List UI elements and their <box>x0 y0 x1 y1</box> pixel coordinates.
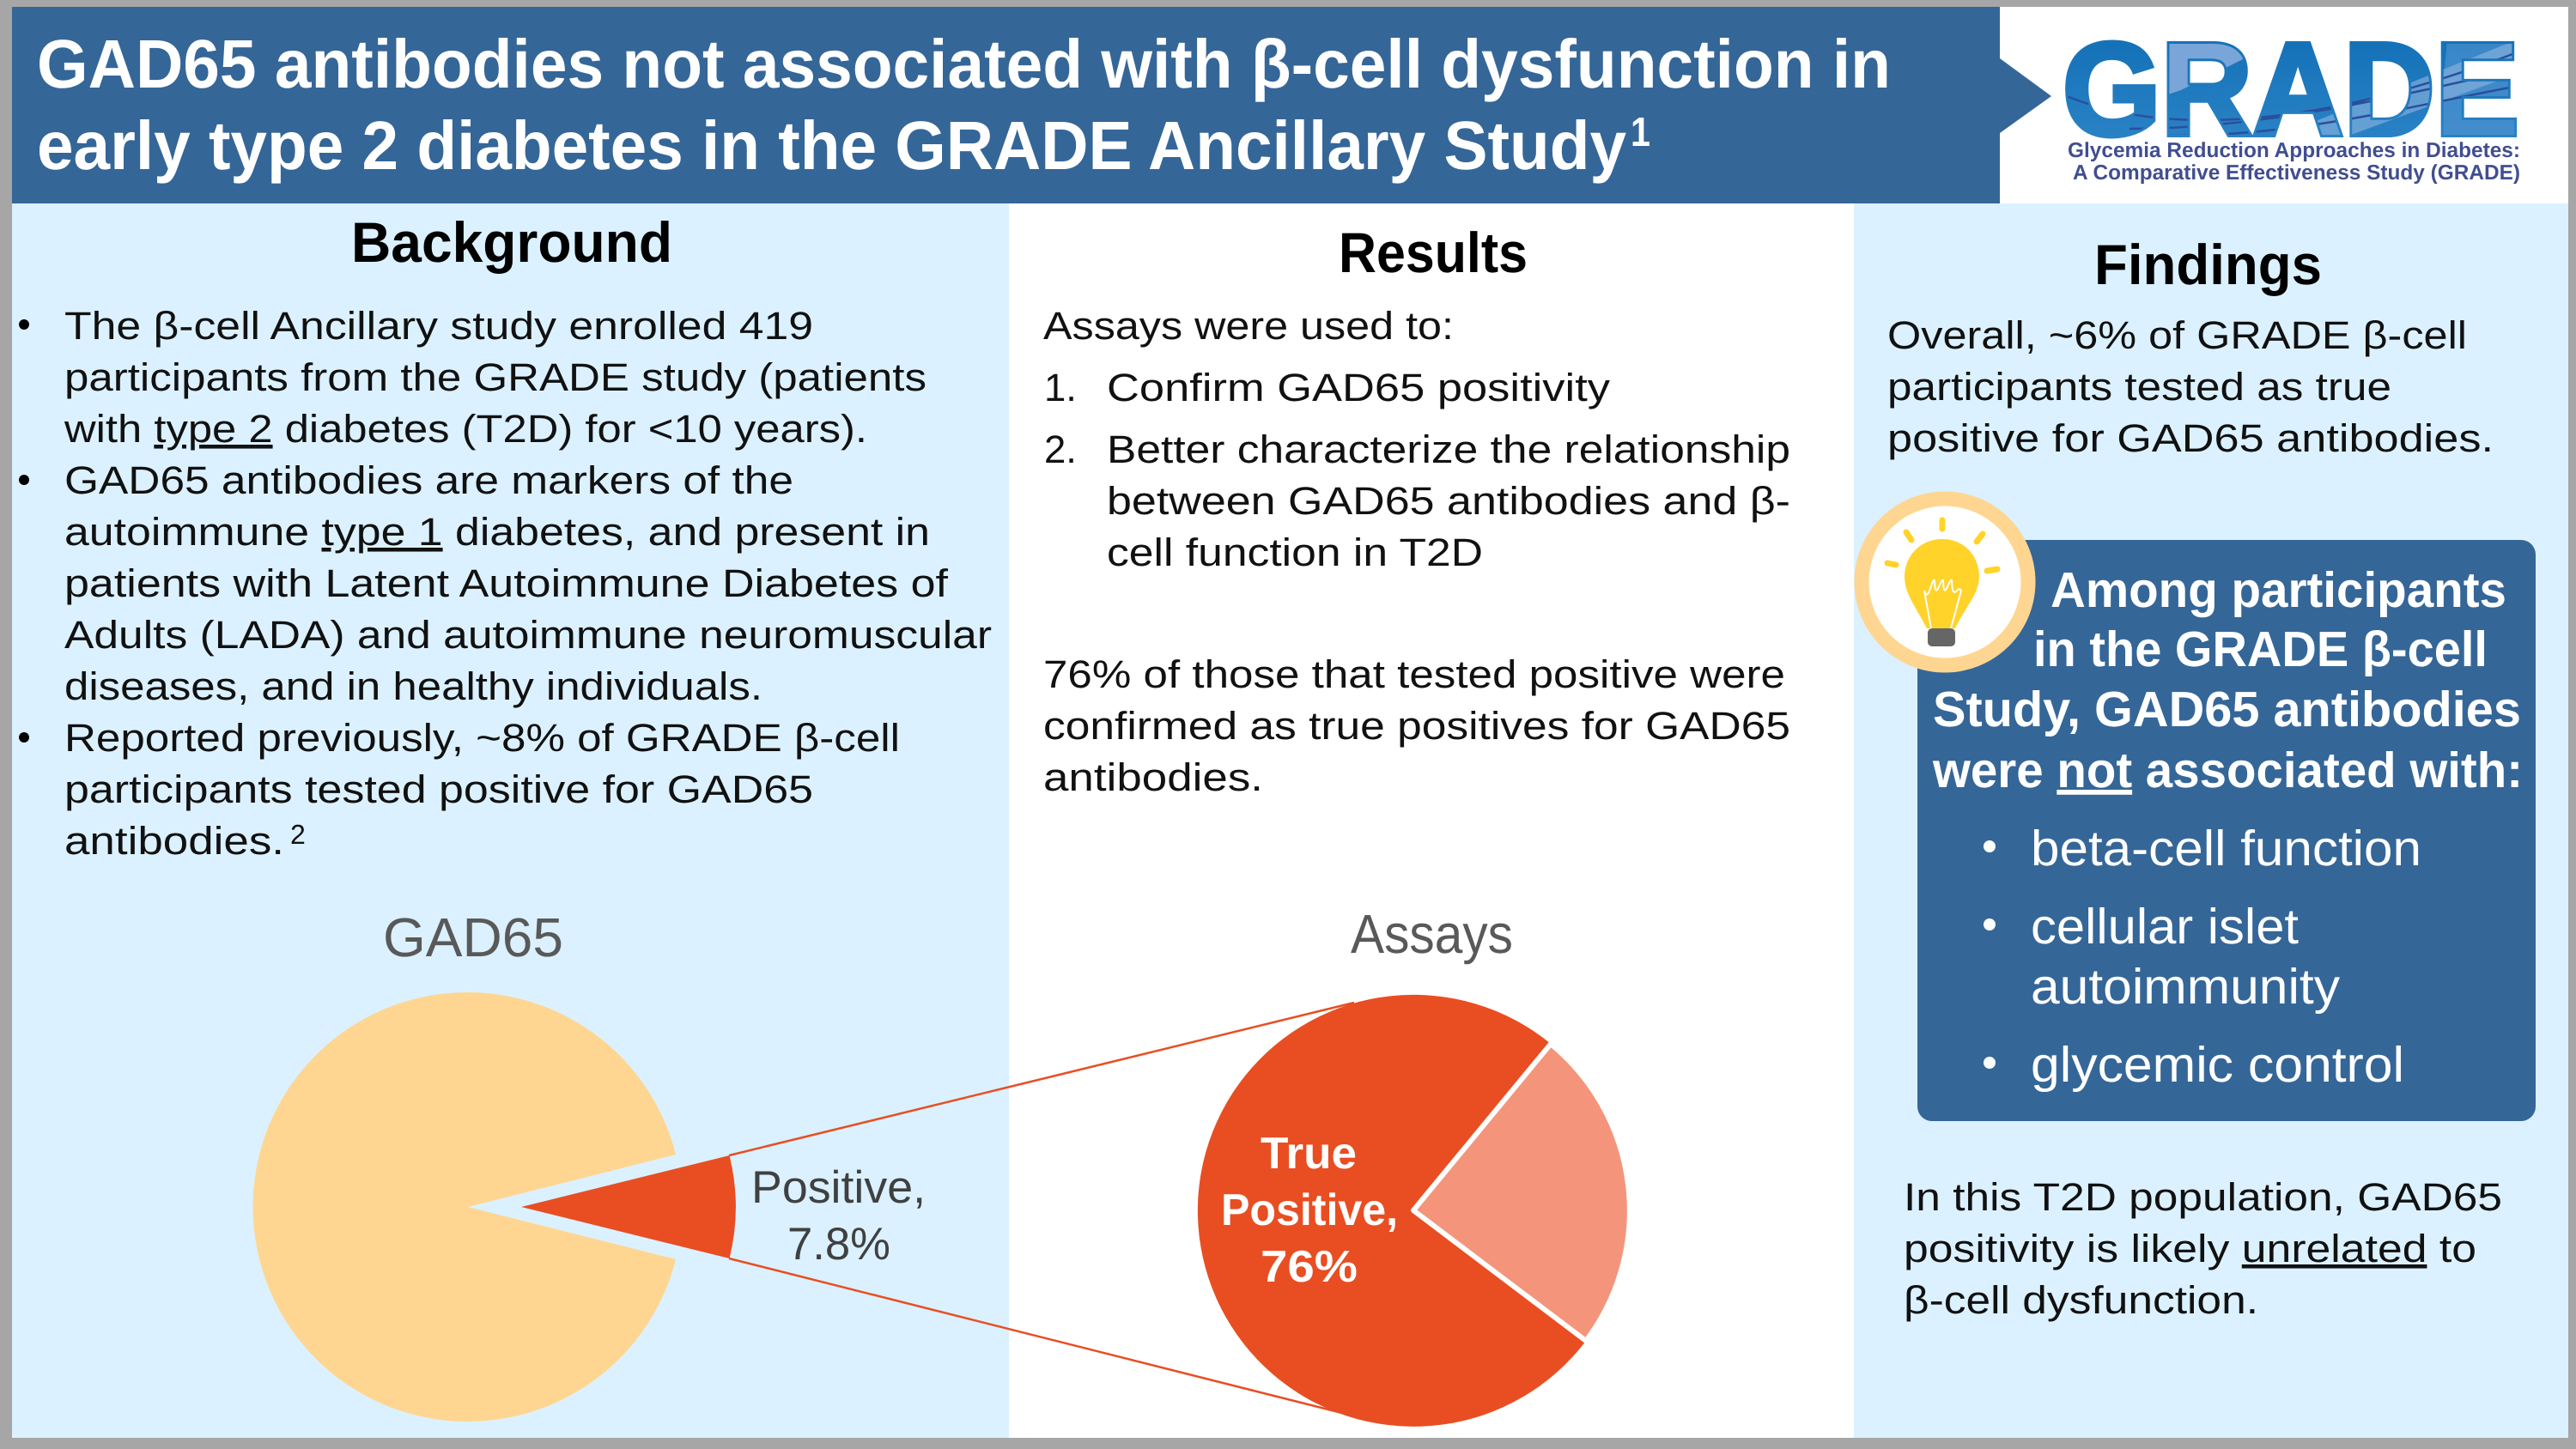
background bullet list: Adults (LADA) and autoimmune neuromuscular <box>64 613 992 657</box>
background bullet list: participants tested positive for GAD65 <box>64 767 813 811</box>
results text: assay aims: between GAD65 antibodies and β- <box>1107 479 1790 523</box>
findings text: conclusion: β-cell dysfunction. <box>1904 1278 2258 1322</box>
logo: GRADE <box>2000 7 2568 203</box>
findings heading: Findings <box>2094 233 2322 296</box>
logo: GRADE: Glycemia Reduction Approaches in Diabetes: <box>2068 139 2520 162</box>
results text: assay aims: 1. <box>1044 366 1077 409</box>
findings text: conclusion <box>1904 1175 2502 1322</box>
background bullet list: Reported previously, ~8% of GRADE β-cell <box>64 716 900 760</box>
callout box: were not associated with: <box>1932 743 2523 798</box>
background bullet list: autoimmune type 1 diabetes, and present in <box>64 510 930 554</box>
callout box <box>1917 540 2536 1121</box>
callout box: autoimmunity <box>2031 959 2340 1015</box>
label: positive 7.8%: Positive, <box>751 1162 926 1213</box>
panel: background <box>12 203 1009 1438</box>
findings text: overall: Overall, ~6% of GRADE β-cell <box>1887 313 2467 357</box>
pie chart: Assays <box>1198 995 1630 1427</box>
results text: confirmation: 76% of those that tested positive were <box>1043 652 1785 696</box>
results text: assay aims: cell function in T2D <box>1107 530 1483 574</box>
results text: assay aims: Better characterize the relationship <box>1107 427 1790 471</box>
background heading: Background <box>351 210 672 274</box>
pie chart title: Assays: Assays <box>1351 903 1513 965</box>
label: true positive 76%: Positive, <box>1221 1185 1398 1235</box>
callout box: cellular islet <box>2031 899 2299 955</box>
results text: confirmation <box>1043 652 1790 799</box>
title: early type 2 diabetes in the GRADE Ancillary Study <box>37 107 1626 184</box>
logo: GRADE: A Comparative Effectiveness Study (GRADE) <box>2073 161 2520 185</box>
logo: GRADE: GRADE <box>2063 15 2519 163</box>
results text: confirmation: antibodies. <box>1043 755 1263 799</box>
findings text: overall <box>1887 313 2494 460</box>
results text: confirmation: confirmed as true positives for GAD65 <box>1043 704 1790 748</box>
callout box: beta-cell function <box>2031 821 2421 876</box>
callout box: glycemic control <box>2031 1037 2404 1093</box>
background bullet list: 2 <box>290 819 306 850</box>
background bullet list: antibodies. <box>64 819 284 863</box>
findings text: conclusion: In this T2D population, GAD65 <box>1904 1175 2502 1219</box>
label: true positive 76% <box>1221 1129 1398 1292</box>
title <box>37 26 1891 184</box>
pie chart: GAD65 <box>253 992 736 1422</box>
background bullet list: participants from the GRADE study (patients <box>64 355 927 399</box>
label: true positive 76%: True <box>1261 1129 1357 1179</box>
title: 1 <box>1631 110 1650 155</box>
background bullet list: diseases, and in healthy individuals. <box>64 664 762 708</box>
background bullet list: GAD65 antibodies are markers of the <box>64 458 793 502</box>
label: positive 7.8% <box>751 1162 926 1270</box>
results text: assay aims: Assays were used to: <box>1043 304 1454 348</box>
icon: light bulb <box>1862 499 2028 665</box>
background bullet list: patients with Latent Autoimmune Diabetes of <box>64 561 948 605</box>
callout box: Study, GAD65 antibodies <box>1933 682 2521 737</box>
callout box: Among participants <box>2050 562 2506 618</box>
title: GAD65 antibodies not associated with β-cell dysfunction in <box>37 26 1891 102</box>
background bullet list: The β-cell Ancillary study enrolled 419 <box>64 304 813 348</box>
label: positive 7.8%: 7.8% <box>787 1219 890 1270</box>
label: true positive 76%: 76% <box>1261 1242 1358 1292</box>
pie chart title: GAD65: GAD65 <box>383 906 563 968</box>
panel: findings <box>1854 203 2568 1438</box>
results text: assay aims: Confirm GAD65 positivity <box>1107 366 1610 409</box>
background bullet list: with type 2 diabetes (T2D) for <10 years). <box>64 407 867 451</box>
connector lines <box>729 1003 1354 1413</box>
results text: assay aims: 2. <box>1044 427 1077 471</box>
panel: results <box>1009 203 1854 1438</box>
header banner with arrow <box>12 7 2051 203</box>
results text: assay aims <box>1043 304 1790 574</box>
callout box: in the GRADE β-cell <box>2033 621 2488 677</box>
findings text: overall: participants tested as true <box>1887 365 2391 409</box>
results heading: Results <box>1339 221 1528 284</box>
findings text: conclusion: positivity is likely unrelated to <box>1904 1227 2476 1270</box>
background bullet list <box>19 304 992 863</box>
findings text: overall: positive for GAD65 antibodies. <box>1887 416 2494 460</box>
